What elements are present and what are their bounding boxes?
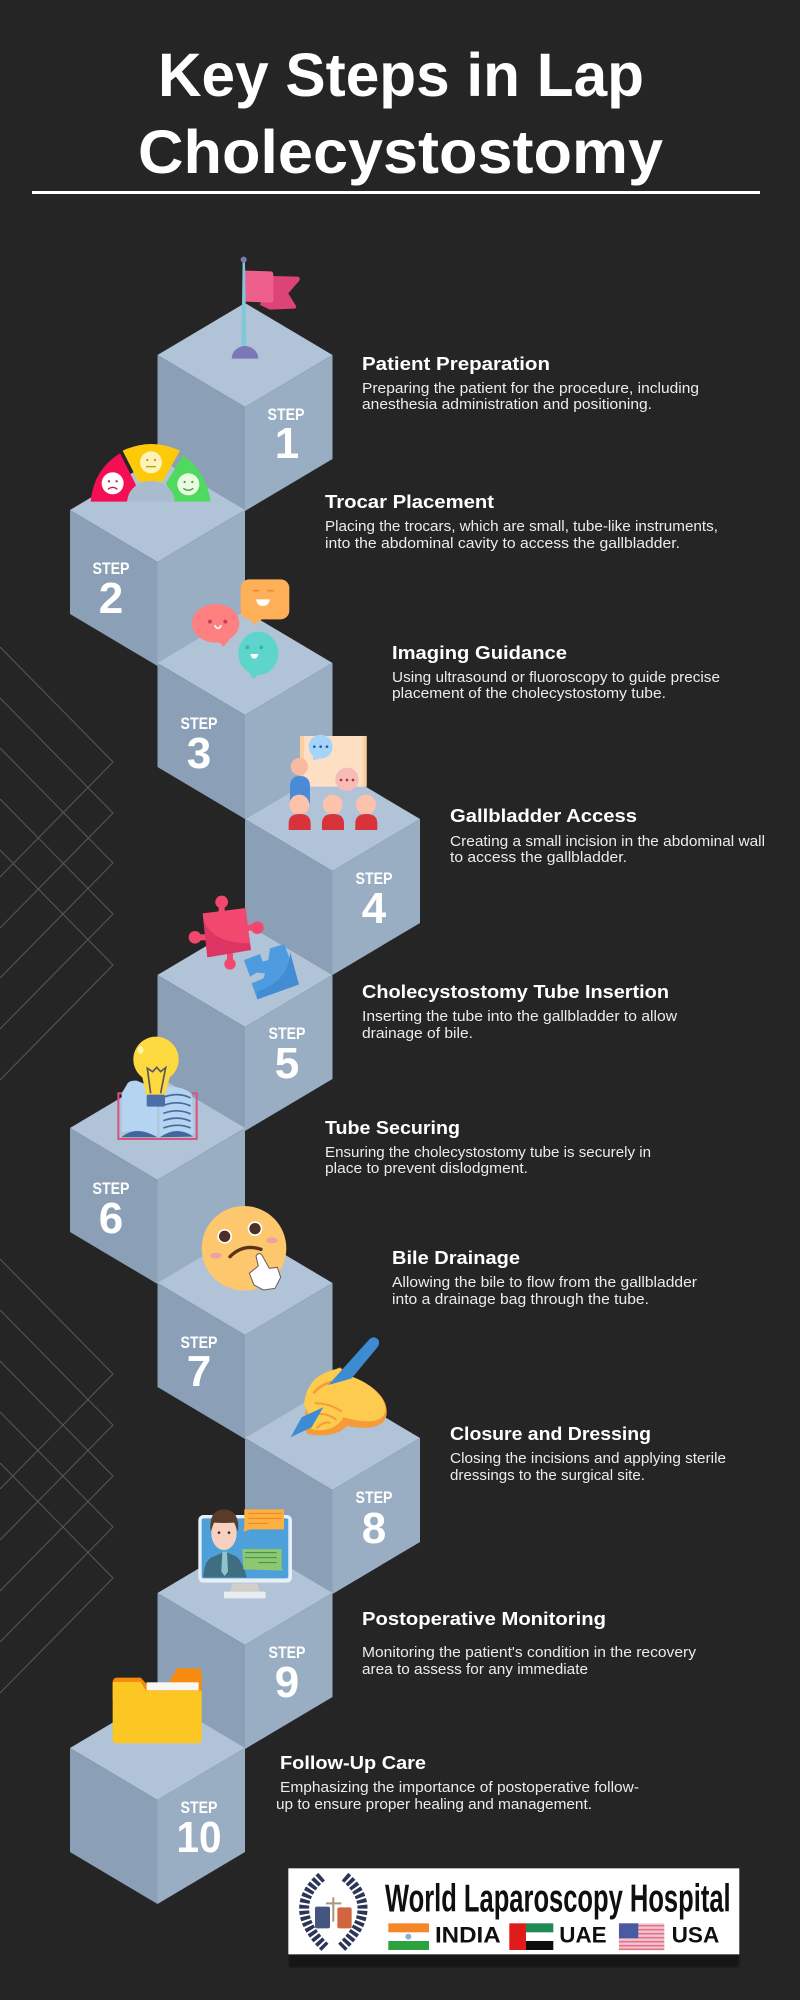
cube 9 [158,1541,332,1749]
icon: puzzle pieces [189,896,299,999]
step label 6: STEP [92,1180,130,1198]
step 4 text: Creating a small incision in the abdominal wall [450,834,765,850]
panel: step 6 [70,1037,651,1284]
step label 9: STEP [268,1644,306,1662]
cube 3 [158,611,332,819]
panel: step 8 [245,1337,726,1594]
title: Cholecystostomy [138,118,663,186]
step label 10: STEP [180,1799,218,1817]
panel: step 5 [158,896,678,1131]
cube 8 [245,1386,420,1594]
step 10 text: Emphasizing the importance of postoperative follow- [280,1780,639,1796]
cube 6 [70,1076,245,1284]
title: Key Steps in Lap [158,41,644,109]
icon: chat bubbles [192,579,289,679]
step label 2: STEP [92,560,130,578]
step label 8 [356,1489,392,1553]
step 10 text: Follow-Up Care [280,1752,426,1773]
step label 9: 9 [275,1658,299,1707]
step label 6: 6 [99,1194,123,1243]
step 8 text: dressings to the surgical site. [450,1468,645,1484]
icon: presentation audience [289,735,377,830]
step 3 text: placement of the cholecystostomy tube. [392,686,666,702]
panel: step 7 [158,1206,697,1439]
cube 1 [158,303,332,511]
icon: light bulb and book [118,1037,197,1139]
step 9 text [362,1608,697,1678]
icon: folder [113,1668,202,1743]
cube 2 [70,458,245,666]
cube 5 [158,923,332,1131]
panel: step 3 [158,579,720,819]
step label 10: 10 [176,1813,222,1862]
step label 3: STEP [180,715,218,733]
step 3 text [392,642,720,702]
step 4 text: to access the gallbladder. [450,850,627,866]
logo: World Laparoscopy Hospital: INDIA [435,1923,501,1948]
step label 4 [356,870,392,933]
step 7 text: Allowing the bile to flow from the gallbladder [392,1275,697,1291]
step 2 text: into the abdominal cavity to access the gallbladder. [325,536,680,552]
step label 1: STEP [268,406,304,424]
step 8 text [450,1423,726,1484]
step label 7: STEP [180,1334,218,1352]
title underline [32,191,760,194]
icon: mood gauge [91,444,211,502]
icon: hand writing with pen [291,1337,387,1437]
step 10 text: up to ensure proper healing and management. [276,1797,592,1813]
step 2 text: Placing the trocars, which are small, tube-like instruments, [325,519,718,535]
step label 2: 2 [99,574,123,623]
step 5 text [362,981,678,1042]
step 9 text: Postoperative Monitoring [362,1608,606,1629]
panel: step 10 [70,1668,639,1904]
step 3 text: Imaging Guidance [392,642,567,663]
panel: step 9 [158,1509,697,1749]
step 7 text: into a drainage bag through the tube. [392,1292,649,1308]
icon: thinking face [202,1206,286,1291]
logo: World Laparoscopy Hospital [288,1868,739,1968]
step label 8: 8 [362,1504,386,1553]
step label 5: STEP [268,1025,306,1043]
panel: step 4 [245,735,765,975]
step 8 text: Closing the incisions and applying sterile [450,1451,726,1467]
step 8 text: Closure and Dressing [450,1423,651,1444]
step 2 text [325,491,718,552]
step label 4: 4 [362,884,387,933]
step label 3 [180,715,218,778]
step 5 text: Inserting the tube into the gallbladder to allow [362,1009,678,1025]
step 5 text: Cholecystostomy Tube Insertion [362,981,669,1002]
step 5 text: drainage of bile. [362,1026,473,1042]
step 9 text: area to assess for any immediate [362,1662,588,1678]
step 6 text: Tube Securing [325,1117,460,1138]
step label 8: STEP [356,1489,392,1507]
step label 9 [268,1644,306,1707]
title [138,41,663,186]
logo: World Laparoscopy Hospital: UAE [559,1923,607,1948]
step 1 text: anesthesia administration and positioning. [362,397,652,413]
step 7 text [392,1247,697,1308]
step 6 text: place to prevent dislodgment. [325,1161,528,1177]
step label 1 [268,406,304,468]
step label 5 [268,1025,306,1088]
step 4 text: Gallbladder Access [450,805,637,826]
step 6 text: Ensuring the cholecystostomy tube is securely in [325,1145,651,1161]
step label 6 [92,1180,130,1243]
logo: World Laparoscopy Hospital: USA [672,1923,719,1948]
icon: flag [232,257,300,359]
step 1 text: Preparing the patient for the procedure, including [362,381,699,397]
step 6 text [325,1117,651,1177]
panel: step 2 [70,444,718,666]
icon: monitor with doctor [198,1509,292,1598]
step label 5: 5 [275,1039,299,1088]
step label 4: STEP [356,870,392,888]
step label 7 [180,1334,218,1396]
step 7 text: Bile Drainage [392,1247,520,1268]
cube 4 [245,767,420,975]
panel: step 1 [158,257,699,511]
step 1 text: Patient Preparation [362,353,550,374]
cube 10 [70,1696,245,1904]
step 1 text [362,353,699,413]
step 10 text [276,1752,639,1813]
step 3 text: Using ultrasound or fluoroscopy to guide precise [392,670,720,686]
step label 7: 7 [187,1347,211,1396]
step 2 text: Trocar Placement [325,491,494,512]
step 9 text: Monitoring the patient's condition in the recovery [362,1645,697,1661]
step label 3: 3 [187,729,211,778]
step label 2 [92,560,130,623]
step label 1: 1 [275,419,299,468]
cube 7 [158,1231,332,1439]
step 4 text [450,805,765,866]
